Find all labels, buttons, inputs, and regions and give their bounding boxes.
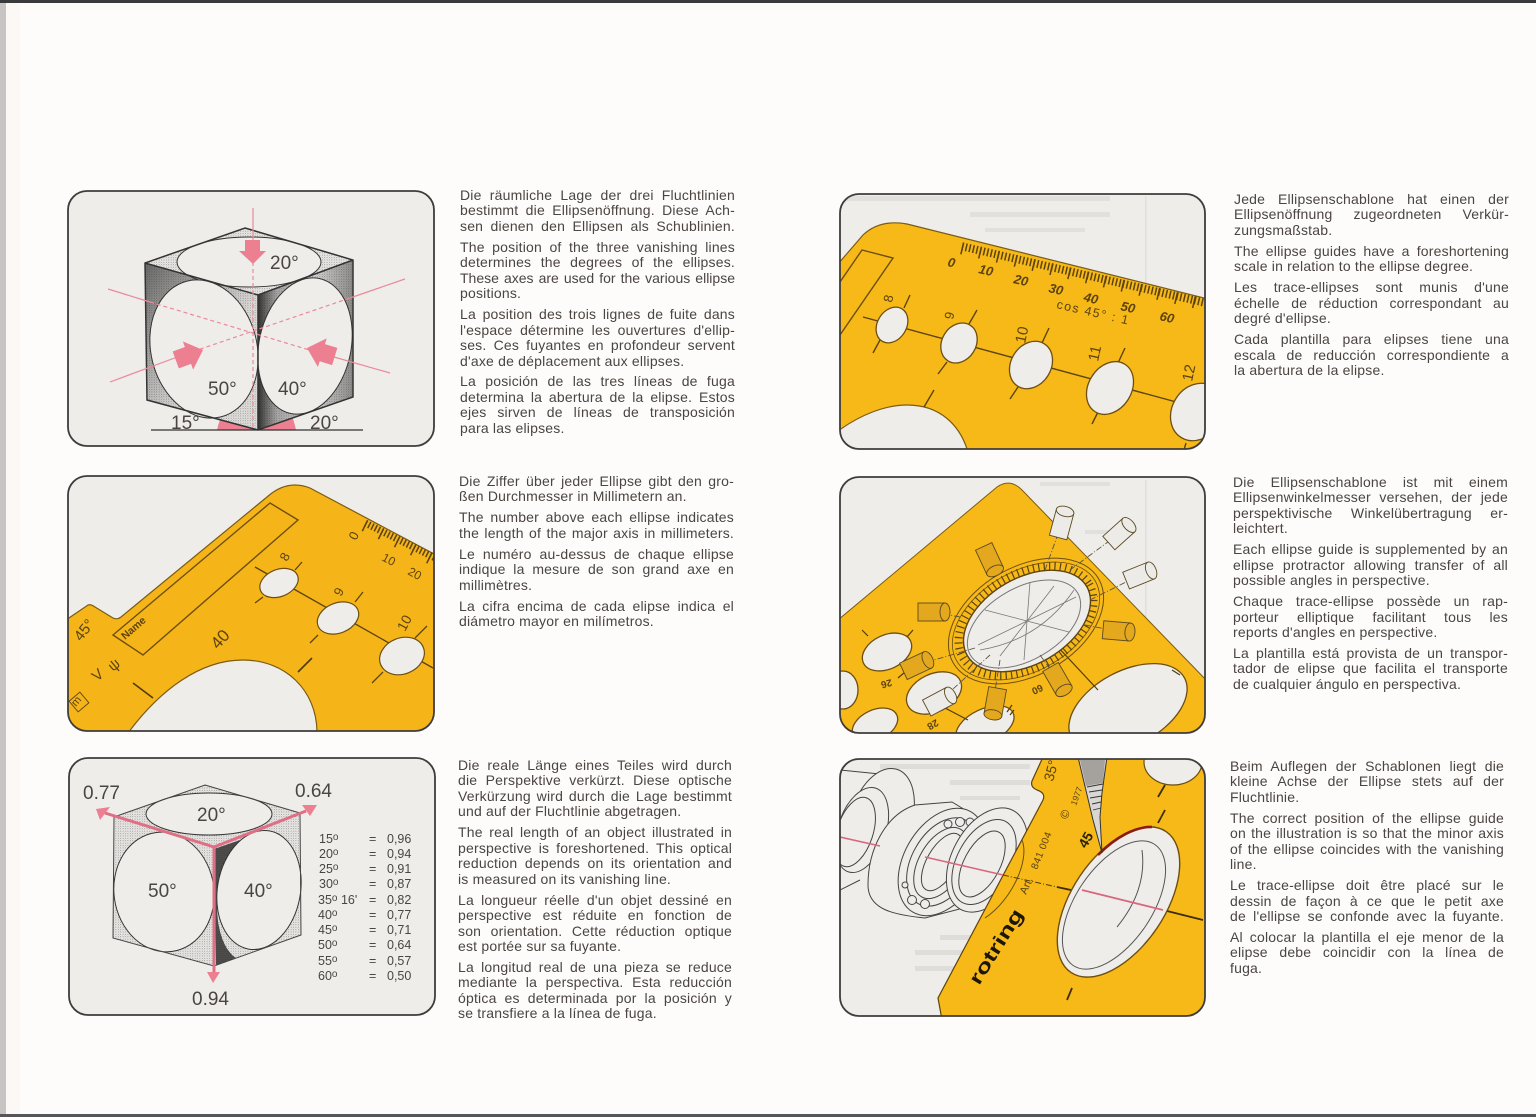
text block: vanishing lines: para las elipses. (460, 420, 565, 436)
stencil labels: V (89, 666, 107, 685)
ruler and ellipse labels: cos 45° : 1 (1055, 297, 1131, 328)
text block: ellipse numbers: the length of the major axis in millimeters. (459, 525, 734, 541)
text block: template position: kleine Achse der Ellipse stets auf der (1230, 773, 1504, 789)
text block: foreshortening scale: Cada plantilla para elipses tiene una (1234, 331, 1509, 347)
stencil texts: © (1057, 808, 1073, 821)
large ellipse cutout (128, 660, 317, 733)
dash-dot guide lines (934, 538, 1125, 689)
text block: vanishing lines: determines the degrees of the ellipses. (460, 254, 735, 270)
ruler and ellipse labels: 40 (1081, 289, 1101, 307)
text block: ellipse protractor: Chaque trace-ellipse possède un rap- (1233, 593, 1508, 609)
text block: vanishing lines: d'axe de déplacement aux ellipses. (460, 353, 684, 369)
foreshortening table: 0,82 (387, 893, 411, 907)
panel: stencil with ruler and cos scale (838, 194, 1234, 452)
text block: foreshortening: La longueur réelle d'un objet dessiné en (458, 892, 732, 908)
text block: foreshortening (458, 757, 732, 1021)
text block: foreshortening: die Perspektive verkürzt. Diese optische (458, 772, 732, 788)
text block: template position: on the illustration is so that the minor axis (1230, 825, 1504, 841)
foreshortening table: 0,57 (387, 954, 411, 968)
text block: ellipse protractor: leichtert. (1233, 520, 1288, 536)
angle labels: 15° (171, 413, 200, 434)
yellow stencil (938, 757, 1208, 1020)
foreshortening table: 0,94 (387, 847, 411, 861)
ruler and ellipse labels (880, 254, 1199, 383)
panel: cube with vanishing lines (68, 191, 434, 446)
stencil labels: ψ (105, 655, 124, 675)
foreshortening table: o (332, 954, 338, 965)
stencil texts: 1977 (1068, 785, 1084, 807)
foreshortening table: o (333, 862, 339, 873)
text block: foreshortening: Die reale Länge eines Teiles wird durch (458, 757, 732, 773)
foreshortening table: 35 (318, 893, 332, 907)
text block: foreshortening: The real length of an object illustrated in (458, 824, 732, 840)
angle labels: 50° (208, 379, 237, 400)
text block: vanishing lines: sen dienen den Ellipsen als Schublinien. (460, 218, 735, 234)
text block: ellipse numbers: indique la mesure de son grand axe en (459, 561, 734, 577)
foreshortening table: o (333, 877, 339, 888)
foreshortening table: o (333, 847, 339, 858)
foreshortening table: = (369, 969, 376, 983)
text block: foreshortening: und auf der Fluchtlinie abgetragen. (458, 803, 681, 819)
foreshortening table: = (369, 877, 376, 891)
stencil labels: m (69, 694, 84, 709)
foreshortening table: 30 (319, 877, 333, 891)
yellow stencil (838, 483, 1208, 736)
arrow: right (307, 338, 338, 367)
name field: Name (119, 614, 149, 642)
text block: ellipse numbers: ßen Durchmesser in Millimetern an. (459, 488, 687, 504)
text block: ellipse protractor: perspektivische Winkelübertragung er- (1233, 505, 1508, 521)
vanishing lines (108, 208, 405, 430)
pink base shape (217, 418, 296, 430)
text block: ellipse numbers (459, 473, 734, 629)
text block: foreshortening scale: Ellipsenöffnung zugeordneten Verkür- (1234, 206, 1509, 222)
small ellipses (259, 568, 425, 676)
text block: foreshortening: est portée sur sa fuyante. (458, 938, 621, 954)
text block: ellipse protractor: ellipse protractor allowing transfer of all (1233, 557, 1508, 573)
text block: template position: de l'ellipse se confonde avec la fuyante. (1230, 908, 1504, 924)
foreshortening table: 40 (318, 908, 332, 922)
text block: ellipse protractor: possible angles in perspective. (1233, 572, 1430, 588)
large ellipse cutout (1032, 806, 1205, 998)
text block: ellipse protractor: reports d'angles en perspective. (1233, 624, 1437, 640)
foreshortening table: 0,87 (387, 877, 411, 891)
text block: foreshortening: se transfiere a la línea de fuga. (458, 1005, 657, 1021)
stencil texts: 841 004 (1030, 830, 1055, 871)
foreshortening table: = (369, 954, 376, 968)
text block: foreshortening scale: Jede Ellipsenschablone hat einen der (1234, 191, 1509, 207)
foreshortening table: 0,64 (387, 938, 411, 952)
foreshortening table: o (333, 832, 339, 843)
stencil numbers (881, 679, 1043, 730)
stencil labels: 0 (345, 529, 362, 542)
text block: ellipse protractor: tador de elipse que facilita el transporte (1233, 660, 1508, 676)
foreshortening table: 0,50 (387, 969, 411, 983)
arrow: left (172, 342, 203, 370)
ruler (364, 523, 435, 561)
text block: foreshortening scale: degré d'ellipse. (1234, 310, 1331, 326)
foreshortening table: o (332, 908, 338, 919)
cylinders (900, 504, 1159, 721)
axis values: 0.77 (83, 783, 120, 804)
foreshortening table: o (332, 969, 338, 980)
ellipses 8 to 12 (875, 306, 1204, 442)
text block: foreshortening scale: la abertura de la elipse. (1234, 362, 1385, 378)
yellow stencil (838, 223, 1208, 452)
text block: vanishing lines: La position des trois lignes de fuite dans (460, 306, 735, 322)
text block: vanishing lines: The position of the three vanishing lines (460, 239, 735, 255)
arrow: top (239, 240, 266, 264)
stencil numbers: 28 (924, 716, 940, 732)
axis and ticks (863, 295, 1186, 450)
ruler and ellipse labels: 12 (1179, 363, 1199, 383)
stencil labels: 8 (276, 550, 293, 563)
axis values (83, 781, 332, 1010)
pencil (1078, 757, 1107, 853)
stencil labels: 40 (207, 626, 234, 653)
text block: ellipse protractor (1233, 474, 1508, 692)
ruler and ellipse labels: 8 (880, 293, 896, 304)
ruler and ellipse labels: 20 (1011, 271, 1031, 289)
foreshortening table: 0,77 (387, 908, 411, 922)
foreshortening table: 25 (319, 862, 333, 876)
ruler and ellipse labels: 10 (977, 261, 996, 279)
text block: ellipse numbers: Le numéro au-dessus de chaque ellipse (459, 546, 734, 562)
stencil labels (69, 529, 424, 712)
panel: stencil with ellipse protractor (839, 476, 1206, 734)
panel: cube with foreshortening scale (69, 758, 435, 1015)
ruler and ellipse labels: 11 (1085, 344, 1105, 363)
text block: foreshortening: mediante la perspectiva. Esta reducción (458, 974, 732, 990)
ruler (962, 246, 1206, 305)
text block: ellipse protractor: porteur elliptique facilitant tous les (1233, 609, 1508, 625)
text block: foreshortening scale: échelle de réduction correspondant au (1234, 295, 1509, 311)
stencil labels: 10 (394, 612, 415, 633)
ruler and ellipse labels: 60 (1158, 308, 1177, 326)
foreshortening table: = (369, 938, 376, 952)
axis values: 40° (244, 881, 273, 902)
pink axes with arrowheads (96, 805, 317, 983)
text block: vanishing lines: bestimmt die Ellipsenöffnung. Diese Ach- (460, 202, 735, 218)
large ellipse cutout (838, 405, 968, 452)
protractor (948, 558, 1104, 684)
text block: ellipse numbers: millimètres. (459, 577, 532, 593)
ghost show-through (1040, 480, 1146, 618)
ruler and ellipse labels: 50 (1119, 298, 1138, 316)
stencil labels: 9 (330, 585, 347, 598)
text block: foreshortening: perspective is foreshortened. This optical (458, 840, 732, 856)
angle labels: 20° (270, 253, 299, 274)
text block: vanishing lines: ses. Ces fuyantes en profondeur servent (460, 337, 735, 353)
foreshortening table: = (369, 908, 376, 922)
text block: foreshortening scale: scale in relation to the ellipse degree. (1234, 258, 1473, 274)
ruler and ellipse labels: 10 (1012, 325, 1032, 345)
ruler and ellipse labels: 0 (946, 254, 957, 271)
text block: foreshortening: La longitud real de una pieza se reduce (458, 959, 732, 975)
text block: foreshortening: perspective est réduite en fonction de (458, 907, 732, 923)
text block: vanishing lines: positions. (460, 285, 521, 301)
foreshortening table: 0,71 (387, 923, 411, 937)
text block: ellipse numbers: diámetro mayor en milímetros. (459, 613, 654, 629)
angle labels: 20° (310, 413, 339, 434)
foreshortening table: o (332, 938, 338, 949)
foreshortening table: 0,91 (387, 862, 411, 876)
text block: ellipse protractor: Die Ellipsenschablone ist mit einem (1233, 474, 1508, 490)
foreshortening table: 20 (319, 847, 333, 861)
text block: vanishing lines: ejes sirven de líneas de transposición (460, 404, 735, 420)
text block: foreshortening: reduction depends on its orientation and (458, 855, 732, 871)
text block: foreshortening: Verkürzung wird durch die Lage bestimmt (458, 788, 732, 804)
foreshortening table: 45 (318, 923, 332, 937)
foreshortening table: 16' (337, 893, 357, 907)
text block: ellipse protractor: Each ellipse guide is supplemented by an (1233, 541, 1508, 557)
text block: template position: of the ellipse coincides with the vanishing (1230, 841, 1504, 857)
axis and ticks (255, 562, 433, 683)
foreshortening table: 55 (318, 954, 332, 968)
stencil texts: 35° (1040, 758, 1061, 783)
angle labels (171, 253, 339, 434)
text block: foreshortening scale: escala de reducción correspondiente a (1234, 347, 1509, 363)
text block: template position: The correct position of the ellipse guide (1230, 810, 1504, 826)
text block: template position: dessin de façon à ce que le petit axe (1230, 893, 1504, 909)
panel: stencil over ball bearing (839, 758, 1206, 1017)
foreshortening table: = (369, 893, 376, 907)
cube faces (106, 785, 310, 966)
text block: vanishing lines: l'espace détermine les ouvertures d'ellip- (460, 322, 735, 338)
ruler and ellipse labels: 30 (1047, 280, 1066, 298)
stencil texts (965, 758, 1096, 989)
stencil numbers: 60 (1029, 681, 1044, 696)
foreshortening table: 50 (318, 938, 332, 952)
text block: vanishing lines: La posición de las tres líneas de fuga (460, 373, 735, 389)
text block: vanishing lines (460, 187, 735, 436)
stencil labels: 20 (406, 564, 424, 583)
text block: template position: elipse debe coincidir con la línea de (1230, 944, 1504, 960)
foreshortening table: o (332, 893, 338, 904)
foreshortening table: 0,96 (387, 832, 411, 846)
text block: foreshortening: son orientation. Cette réduction optique (458, 923, 732, 939)
text block: ellipse numbers: La cifra encima de cada elipse indica el (459, 598, 734, 614)
foreshortening table: = (369, 847, 376, 861)
stencil texts: 45 (1075, 829, 1096, 850)
text block: vanishing lines: Die räumliche Lage der drei Fluchtlinien (460, 187, 735, 203)
text block: vanishing lines: determina la abertura de la elipse. Estos (460, 389, 735, 405)
ghost show-through (880, 764, 1030, 971)
angle labels: 40° (278, 379, 307, 400)
foreshortening table: o (332, 923, 338, 934)
foreshortening table: = (369, 923, 376, 937)
name field (113, 503, 298, 655)
text block: ellipse protractor: de cualquier ángulo en perspectiva. (1233, 676, 1461, 692)
text block: foreshortening scale: zungsmaßstab. (1234, 222, 1332, 238)
panel: stencil with name field and ellipses 8 9 10 (66, 476, 436, 735)
stencil texts: rotring (965, 905, 1028, 989)
ruler and ellipse labels: 9 (941, 310, 957, 321)
stencil labels: 45° (71, 616, 98, 644)
stencil numbers: 26 (879, 676, 893, 690)
text block: vanishing lines: These axes are used for the various ellipse (460, 270, 735, 286)
cube faces (136, 228, 364, 430)
stencil labels: 10 (380, 550, 398, 569)
axis values: 20° (197, 805, 226, 826)
text block: foreshortening scale: Les trace-ellipses sont munis d'une (1234, 279, 1509, 295)
text block: ellipse protractor: Ellipsenwinkelmesser versehen, der jede (1233, 489, 1508, 505)
foreshortening table: 15 (319, 832, 333, 846)
text block: foreshortening: óptica es determinada por la posición y (458, 990, 732, 1006)
text block: template position (1230, 758, 1504, 976)
corner ellipse cutout (1144, 739, 1202, 785)
axis values: 50° (148, 881, 177, 902)
lower ellipses (840, 632, 1188, 732)
text block: foreshortening scale: The ellipse guides have a foreshortening (1234, 243, 1509, 259)
axis values: 0.94 (192, 989, 229, 1010)
text block: template position: Le trace-ellipse doit être placé sur le (1230, 877, 1504, 893)
ring seen through (985, 840, 1024, 918)
bearing drawing (826, 760, 1044, 931)
text block: foreshortening scale (1234, 191, 1509, 378)
text block: template position: fuga. (1230, 960, 1262, 976)
text block: ellipse numbers: The number above each ellipse indicates (459, 509, 734, 525)
axis values: 0.64 (295, 781, 332, 802)
text block: template position: Beim Auflegen der Schablonen liegt die (1230, 758, 1504, 774)
stencil texts: Art. (1018, 876, 1036, 896)
name field (840, 250, 893, 335)
text block: ellipse numbers: Die Ziffer über jeder Ellipse gibt den gro- (459, 473, 734, 489)
foreshortening table (318, 832, 411, 983)
foreshortening table: = (369, 862, 376, 876)
yellow stencil (66, 485, 436, 735)
text block: template position: line. (1230, 856, 1257, 872)
foreshortening table: = (369, 832, 376, 846)
vanishing axis (840, 837, 1003, 875)
foreshortening table: 60 (318, 969, 332, 983)
text block: ellipse protractor: La plantilla está provista de un transpor- (1233, 645, 1508, 661)
ghost show-through (846, 196, 1146, 283)
text block: foreshortening: is measured on its vanishing line. (458, 871, 671, 887)
base line (151, 429, 363, 431)
text block: template position: Al colocar la plantilla el eje menor de la (1230, 929, 1504, 945)
text block: template position: Fluchtlinie. (1230, 789, 1299, 805)
